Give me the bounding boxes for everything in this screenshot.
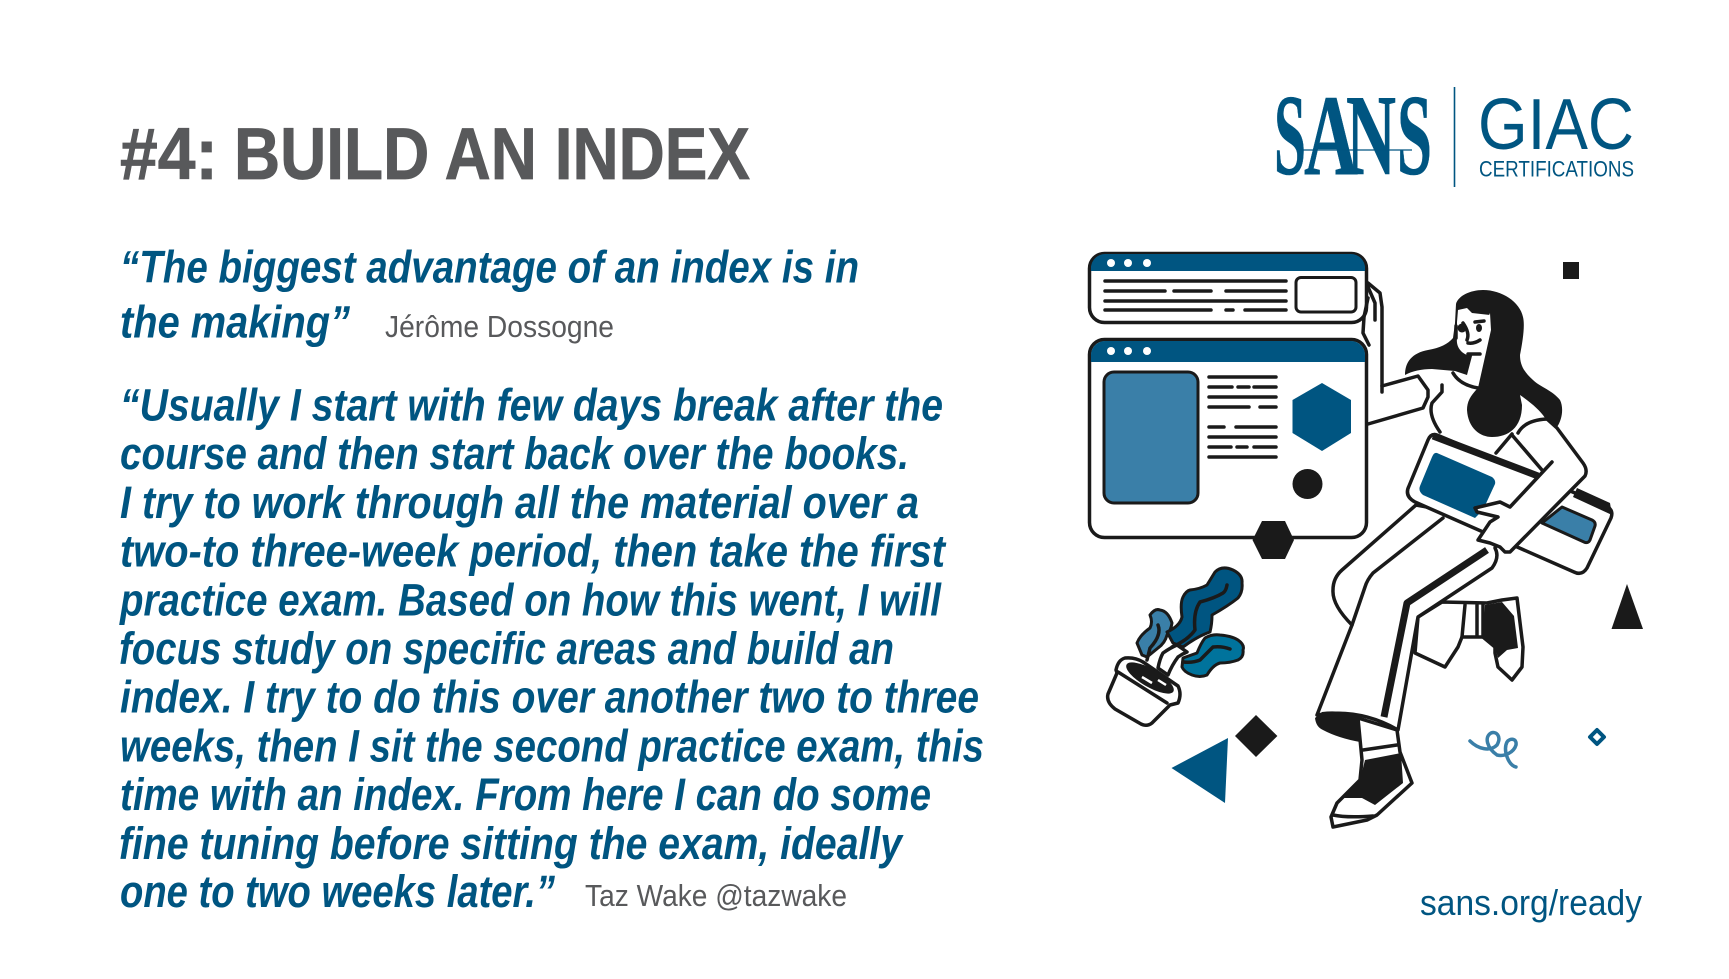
quote: Taz Wake: I try to work through all the material over a [120,477,919,528]
logo subline: Certifications: CERTIFICATIONS [1479,156,1634,182]
decorative black diamond [1235,715,1277,757]
logo wordmark: SANS [1274,72,1432,200]
decorative square [1563,262,1579,279]
decorative small blue diamond [1590,730,1604,744]
tablet [1407,435,1612,573]
quote: Taz Wake: course and then start back over the books. [120,428,909,479]
face [1456,308,1490,355]
title: #4: [120,114,218,195]
quote: Jérôme Dossogne [120,242,859,348]
quote: Taz Wake [119,380,984,917]
logo wordmark: SANS: A [1304,72,1358,200]
attribution: Taz Wake: Taz Wake @tazwake [585,878,847,913]
reaching arm and hand [1363,283,1428,424]
quote: Jérôme Dossogne: the making” [120,296,350,348]
quote: Taz Wake: one to two weeks later.” [120,866,555,917]
quote: Taz Wake: index. I try to do this over another two to three [120,672,979,723]
decorative squiggle [1470,733,1516,767]
quote: Taz Wake: practice exam. Based on how this went, I will [119,574,942,625]
plant leaves [1137,568,1243,676]
torso lines [1431,373,1478,432]
icon: top browser window [1090,254,1366,322]
icon: bottom browser window [1090,340,1366,559]
title: BUILD AN INDEX [234,114,750,195]
logo wordmark: SANS: N [1346,72,1396,200]
logo wordmark: SANS: S [1397,72,1432,200]
attribution: Jérôme Dossogne: Jérôme Dossogne [385,309,614,344]
logo wordmark: GIAC: GIAC [1478,85,1634,165]
holding arm and sleeve [1475,419,1586,552]
quote: Taz Wake: time with an index. From here I can do some [120,769,931,820]
quote: Taz Wake: two-to three-week period, then take the first [120,526,947,577]
quote: Taz Wake: fine tuning before sitting the exam, ideally [119,818,904,869]
front leg [1317,505,1500,730]
quote: Jérôme Dossogne: “The biggest advantage of an index is in [120,242,859,292]
back leg and shoe [1415,598,1523,680]
quote: Taz Wake: focus study on specific areas and build an [119,623,894,674]
decorative blue triangle [1172,738,1228,803]
front shoe [1315,711,1412,827]
decorative black triangle [1612,584,1643,629]
hair [1405,290,1562,437]
plant pot [1108,657,1180,725]
footer url: sans.org/ready [1420,882,1642,923]
logo: SANS GIAC Certifications [1274,72,1634,200]
icon: potted plant [1108,568,1243,725]
quote: Taz Wake: weeks, then I sit the second practice exam, this [120,720,984,771]
logo wordmark: SANS: S [1274,72,1306,200]
quote: Taz Wake: “Usually I start with few days break after the [120,380,943,430]
illustration: woman holding tablet [1315,283,1612,827]
